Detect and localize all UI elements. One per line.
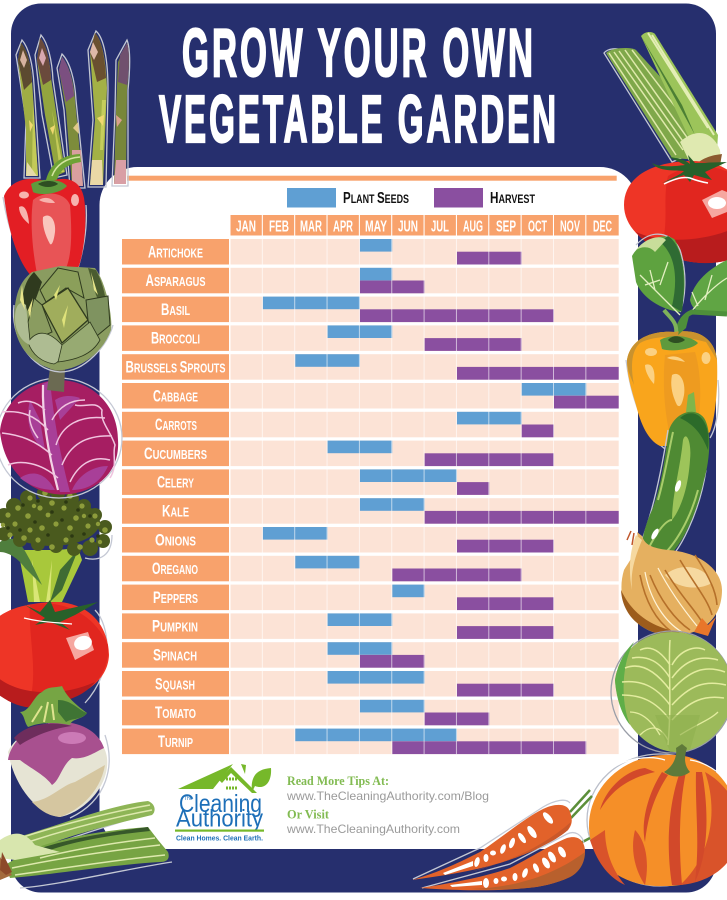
row: oregano [122,556,619,581]
month header: NOV [560,219,580,236]
row: pumpkin [122,613,619,639]
legend: HARVEST [490,190,535,207]
row: tomato: TOMATO [155,704,196,722]
icon: pumpkin [587,744,727,886]
orange rule [127,176,617,181]
logo: The Cleaning Authority: The [184,796,193,802]
icon: spinach leaves [632,234,727,335]
icon: carrots [412,790,592,890]
row: asparagus [122,268,619,293]
row: cucumbers: CUCUMBERS [144,445,207,463]
icon: red tomato top right [624,155,727,263]
month header [230,215,619,236]
row: squash [122,671,619,696]
row: basil: BASIL [161,301,190,319]
icon: celery bottom left [0,801,172,888]
month header: APR [333,219,353,236]
row: turnip [122,729,619,754]
footer links: Read More Tips At: [287,774,389,788]
row: oregano: OREGANO [152,560,198,578]
footer links: Or Visit [287,808,330,822]
icon: red tomato left [0,600,109,708]
logo: The Cleaning Authority: Authority [176,806,263,833]
row: onions: ONIONS [155,531,196,549]
row: brussels sprouts: BRUSSELS SPROUTS [126,358,226,376]
row: turnip: TURNIP [158,733,193,751]
row: kale [122,498,619,524]
month header: OCT [528,219,547,236]
row: spinach [122,642,619,668]
row: cucumbers [122,441,619,466]
icon: turnip [8,686,109,818]
row: onions [122,527,619,552]
row: peppers: PEPPERS [153,589,198,607]
footer links: www.TheCleaningAuthority.com [286,822,460,836]
month header: MAR [300,219,322,236]
logo: The Cleaning Authority: Clean Homes. Clean Earth. [176,836,263,843]
footer links [286,774,489,836]
icon: artichoke [13,266,113,392]
row: carrots [122,412,619,437]
row: tomato [122,700,619,725]
icon: broccoli [0,486,112,602]
logo: The Cleaning Authority [175,764,271,843]
icon: zucchini [640,392,709,565]
row: basil [122,297,619,322]
row: artichoke [122,239,619,264]
icon: yellow bell pepper [626,312,719,449]
row: celery [122,469,619,495]
icon: celery top right [604,32,722,170]
logo: The Cleaning Authority: Cleaning [179,790,262,818]
month header: DEC [593,219,612,236]
row: kale: KALE [162,502,189,520]
row: broccoli: BROCCOLI [151,330,200,348]
planting calendar chart [122,239,619,754]
white chart panel [100,167,638,849]
month header: SEP [496,219,516,236]
row: broccoli [122,325,619,351]
row: asparagus: ASPARAGUS [146,272,206,290]
legend: PLANT SEEDS [343,190,409,207]
month header: JAN [236,219,256,236]
row: peppers [122,585,619,610]
row: artichoke: ARTICHOKE [148,243,203,261]
icon: asparagus spears [16,31,130,188]
month header: JUL [431,219,449,236]
month header: AUG [463,219,483,236]
month header: MAY [365,219,387,236]
icon: red bell pepper [3,154,86,281]
row: pumpkin: PUMPKIN [152,618,198,636]
row: cabbage: CABBAGE [153,387,198,405]
row: carrots: CARROTS [155,416,197,434]
month header: JUN [398,219,418,236]
legend [287,188,535,208]
row: cabbage [122,383,619,408]
row: spinach: SPINACH [153,646,197,664]
icon: red cabbage [0,378,122,498]
row: celery: CELERY [157,474,194,492]
row: squash: SQUASH [155,675,195,693]
title [159,15,559,157]
row: brussels sprouts [122,354,619,380]
footer links: www.TheCleaningAuthority.com/Blog [286,789,489,803]
icon: green cabbage [611,631,727,753]
month header: FEB [269,219,289,236]
icon: onion [621,531,722,636]
